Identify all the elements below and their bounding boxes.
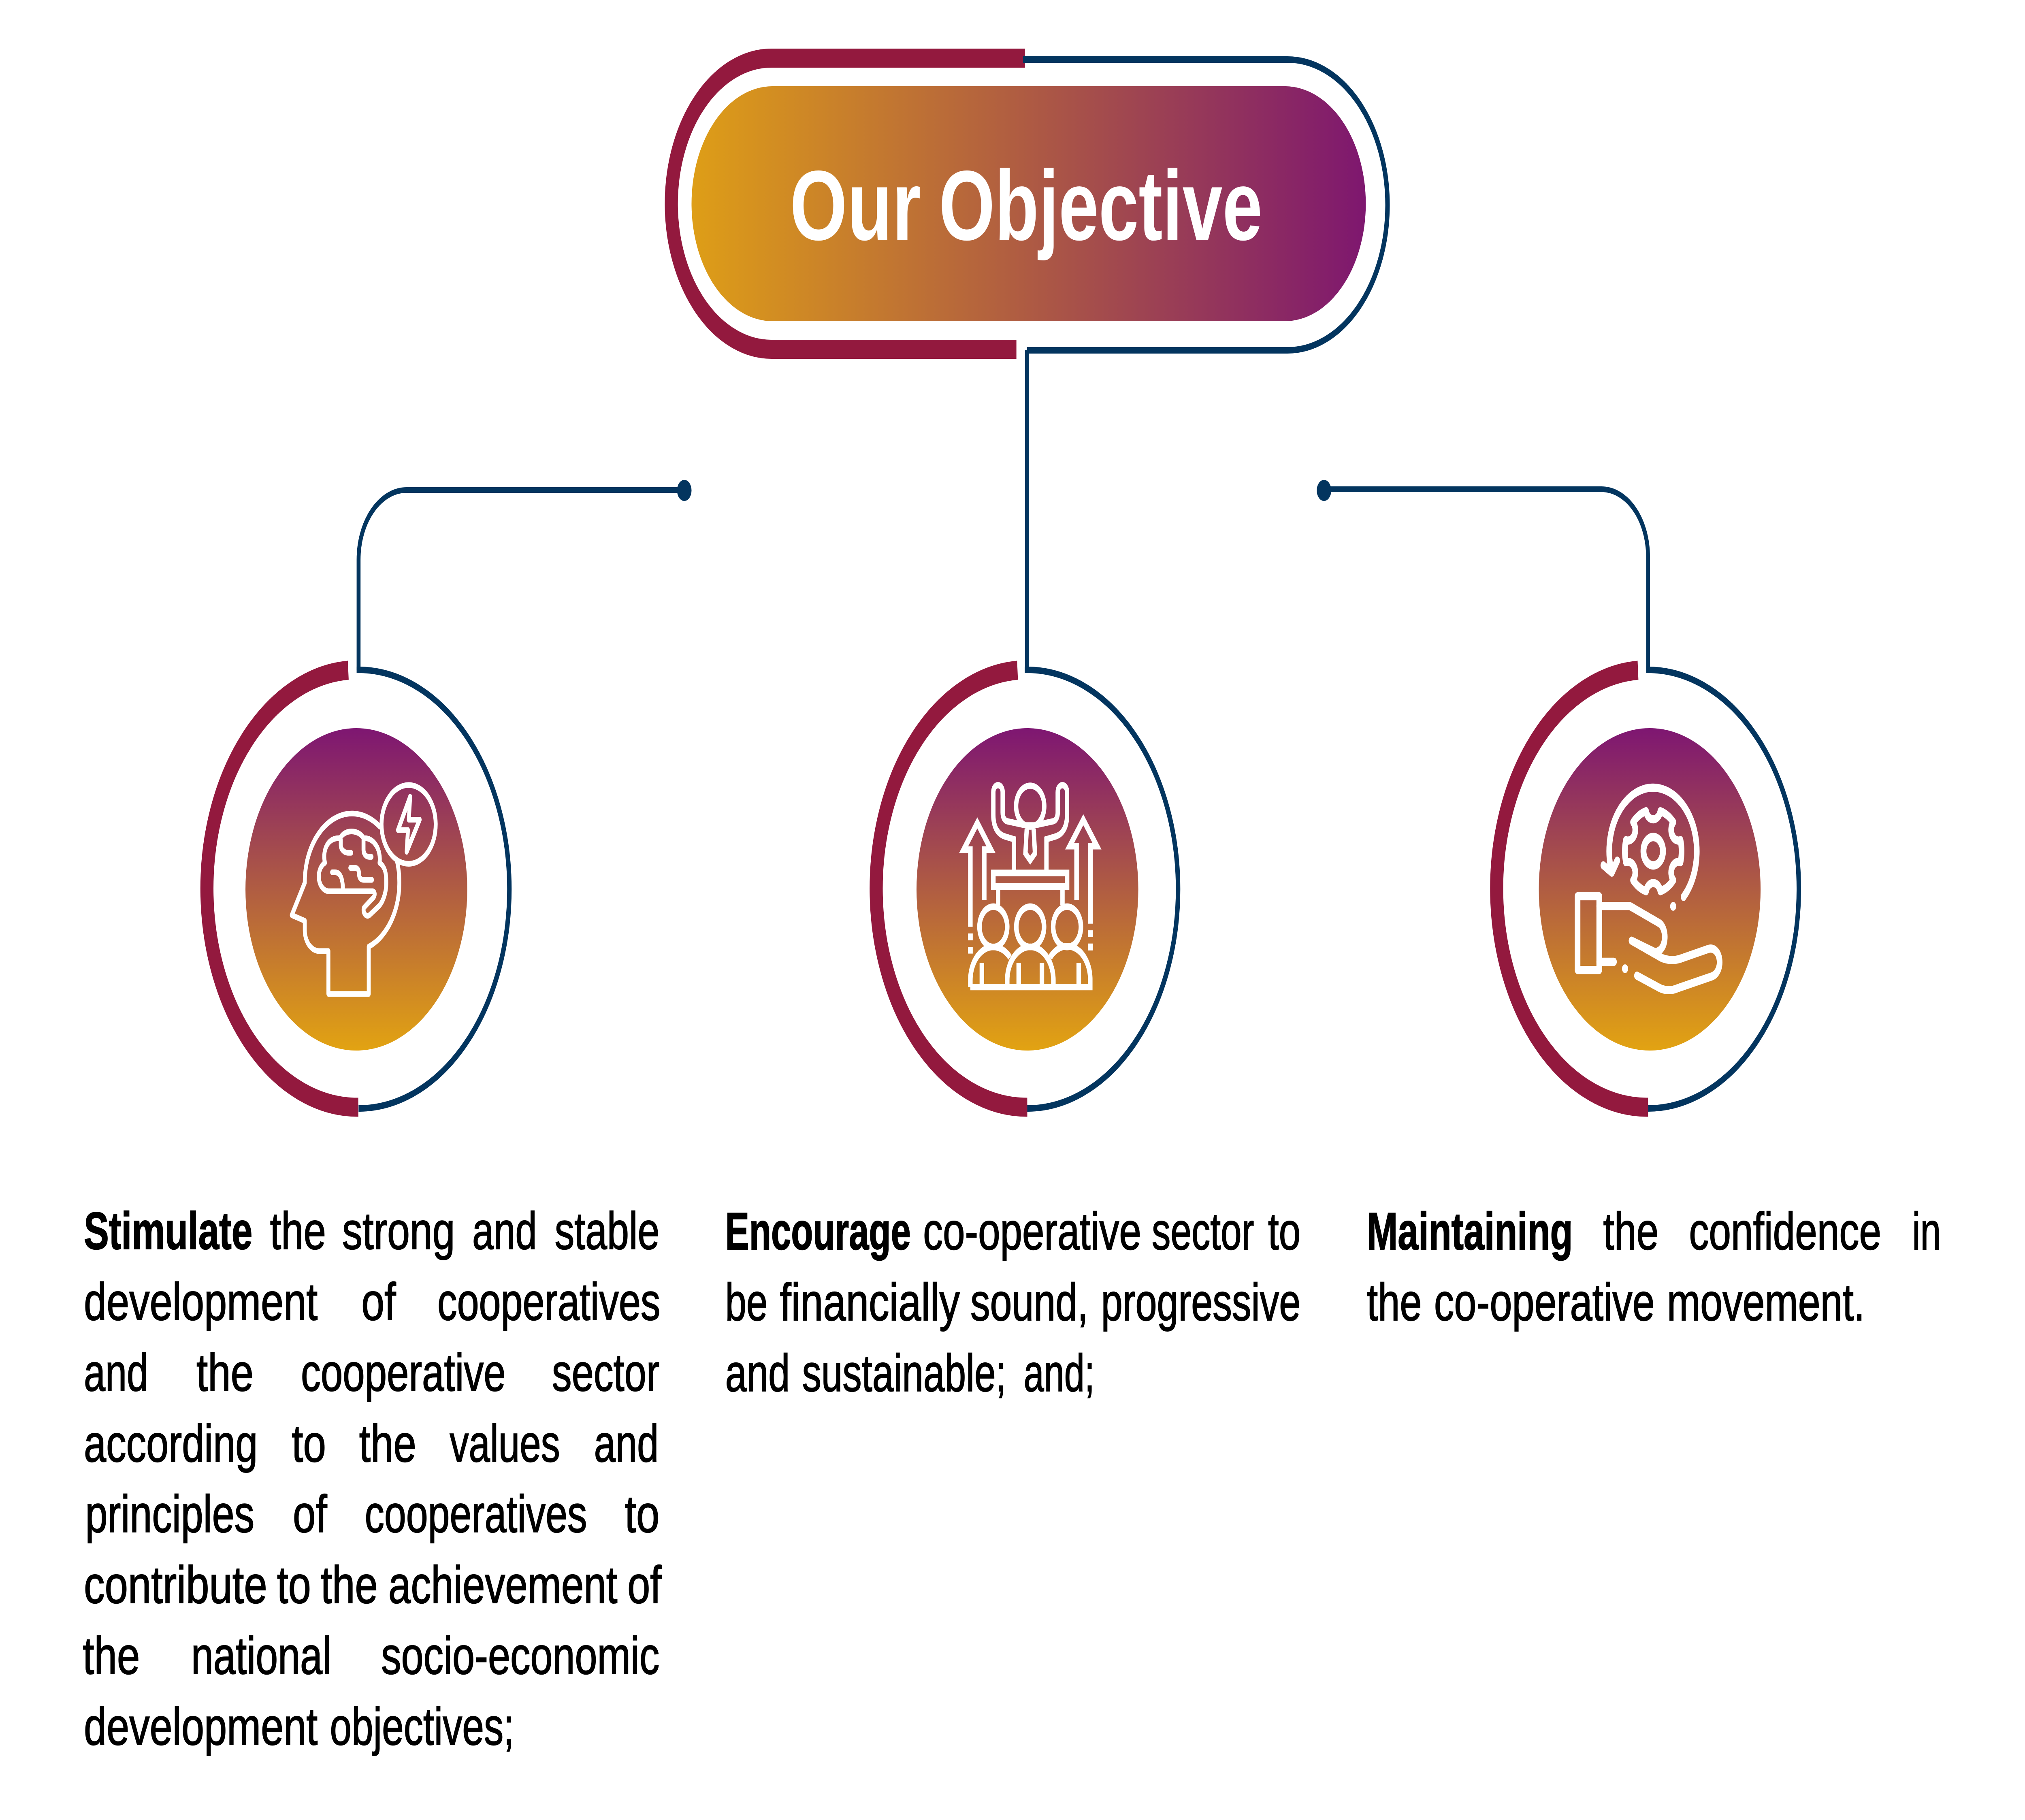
text block: stimulate: socio-economic — [381, 1626, 659, 1685]
icon: head with brain and lightning bolt — [292, 785, 436, 994]
text block: stimulate: the — [83, 1626, 140, 1685]
text block: encourage: co-operative — [923, 1202, 1141, 1261]
text block: maintaining: in — [1912, 1202, 1941, 1261]
text block: stimulate: development — [84, 1272, 318, 1331]
connector: title to centre circle — [1024, 350, 1030, 670]
text block: maintaining: the — [1603, 1202, 1658, 1261]
connector: left branch with dot — [358, 480, 691, 670]
text block: stimulate: values — [450, 1414, 560, 1473]
text block: stimulate: national — [191, 1626, 331, 1685]
text block: encourage: financially — [780, 1272, 960, 1332]
text block: stimulate: objectives; — [330, 1697, 514, 1756]
text block: encourage: to — [1268, 1202, 1300, 1261]
text block: maintaining: the — [1367, 1272, 1422, 1332]
text block: stimulate: the — [270, 1201, 326, 1260]
gradient title pill — [691, 86, 1366, 321]
text block: encourage: sound, — [970, 1272, 1088, 1332]
circle: encourage — [876, 670, 1178, 1108]
text block: stimulate: development — [84, 1697, 318, 1756]
text block: maintaining: Maintaining — [1367, 1202, 1573, 1261]
text block: stimulate: to — [292, 1414, 326, 1473]
crimson frame of title badge — [671, 58, 1025, 349]
text block: encourage: progressive — [1101, 1272, 1300, 1332]
text block: maintaining: co-operative — [1434, 1272, 1655, 1332]
title badge — [671, 58, 1388, 350]
navy frame of title badge — [1023, 60, 1388, 350]
text block: maintaining — [1367, 1202, 1941, 1332]
text block: encourage: and; — [1024, 1343, 1095, 1402]
text block: encourage: and — [725, 1343, 790, 1402]
title text: Objective — [939, 150, 1262, 261]
text block: encourage: sustainable; — [802, 1343, 1006, 1402]
circle: stimulate — [207, 670, 509, 1108]
text block: stimulate: of — [627, 1555, 662, 1614]
connector: right branch with dot — [1317, 480, 1648, 670]
text block: stimulate: to — [625, 1484, 659, 1543]
text block: stimulate: strong — [342, 1201, 455, 1260]
circle: maintaining — [1496, 670, 1799, 1108]
text block: stimulate: of — [361, 1272, 396, 1331]
text block: stimulate: of — [293, 1484, 328, 1543]
text block: stimulate: and — [472, 1201, 537, 1260]
text block: stimulate: principles — [85, 1484, 254, 1543]
text block: stimulate: the — [196, 1343, 254, 1402]
text block: maintaining: confidence — [1689, 1202, 1881, 1261]
text block: stimulate — [83, 1201, 662, 1756]
icon: leader above group with rising arrows — [963, 785, 1097, 987]
text block: stimulate: achievement — [388, 1555, 617, 1614]
text block: encourage: sector — [1152, 1202, 1254, 1261]
text block: stimulate: according — [84, 1414, 258, 1473]
text block: stimulate: cooperatives — [365, 1484, 587, 1543]
text block: encourage: be — [725, 1272, 767, 1332]
text block: stimulate: cooperative — [301, 1343, 506, 1402]
text block: stimulate: and — [594, 1414, 659, 1473]
icon: hand holding gear — [1577, 788, 1720, 990]
text block: stimulate: and — [84, 1343, 148, 1402]
text block: stimulate: the — [321, 1555, 378, 1614]
text block: stimulate: sector — [552, 1343, 659, 1402]
title text: Our — [790, 150, 921, 261]
text block: stimulate: Stimulate — [84, 1201, 252, 1260]
text block: stimulate: to — [277, 1555, 311, 1614]
text block: stimulate: stable — [555, 1201, 659, 1260]
text block: maintaining: movement. — [1667, 1272, 1865, 1332]
text block: stimulate: contribute — [84, 1555, 267, 1614]
text block: encourage: Encourage — [725, 1202, 911, 1261]
text block: encourage — [725, 1202, 1300, 1402]
text block: stimulate: cooperatives — [437, 1272, 660, 1331]
text block: stimulate: the — [359, 1414, 416, 1473]
